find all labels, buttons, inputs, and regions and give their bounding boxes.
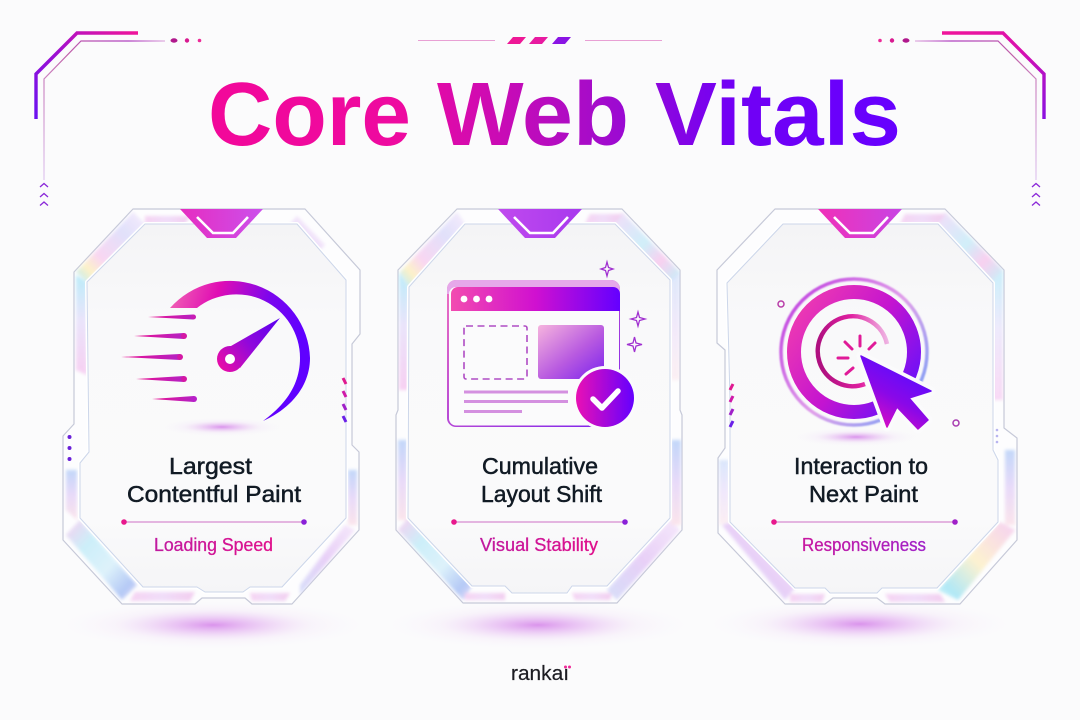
heading: Contentful Paint — [127, 481, 301, 507]
heading — [481, 453, 602, 507]
logo: rankai: rankaï — [511, 663, 569, 685]
subtitle: Loading Speed — [154, 535, 273, 555]
panel: Cumulative Layout Shift — [396, 209, 682, 603]
top tab — [818, 209, 902, 238]
title: Core — [208, 65, 411, 165]
heading: Interaction to — [794, 453, 928, 479]
top center ornament — [418, 37, 662, 44]
heading — [127, 453, 301, 507]
side dots — [996, 429, 998, 443]
top left corner ornament — [36, 33, 201, 206]
icon: sparkles — [601, 262, 645, 352]
side dashes — [730, 384, 733, 427]
panel: Interaction to Next Paint — [717, 209, 1017, 604]
heading: Next Paint — [809, 481, 918, 507]
floor glow: card 2 — [388, 601, 688, 649]
heading — [794, 453, 928, 507]
top right corner ornament — [878, 33, 1044, 206]
title: Web — [437, 65, 629, 165]
divider — [451, 519, 628, 525]
icon: click target with cursor — [778, 279, 959, 446]
floor glow: card 3 — [710, 600, 1010, 648]
top tab — [180, 209, 263, 238]
title: Vitals — [655, 65, 901, 165]
top tab — [498, 209, 582, 238]
icon: browser window with check — [447, 280, 637, 430]
divider — [121, 519, 307, 525]
icon: speedometer — [121, 281, 310, 436]
subtitle: Visual Stability — [480, 535, 598, 555]
heading: Largest — [169, 453, 252, 479]
side dashes — [343, 378, 346, 422]
heading: Layout Shift — [481, 481, 602, 507]
subtitle: Responsiveness — [802, 535, 926, 555]
divider — [771, 519, 958, 525]
side dots — [68, 435, 72, 461]
heading: Cumulative — [482, 453, 598, 479]
title — [208, 65, 901, 165]
floor glow: card 1 — [63, 601, 363, 649]
panel: Largest Contentful Paint — [63, 209, 360, 604]
